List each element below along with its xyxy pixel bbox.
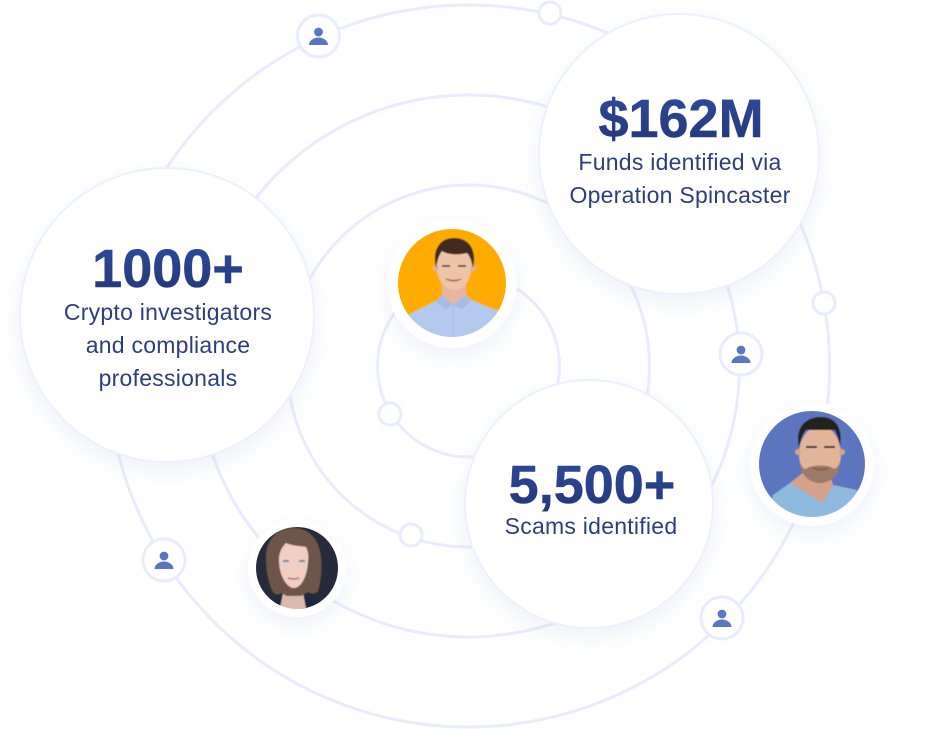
concentric orbit rings: [108, 5, 830, 727]
panel: funds identified stat: Funds identified via: [578, 149, 782, 175]
panel: crypto investigators stat: [20, 168, 314, 462]
icon: user node top: [298, 15, 340, 57]
panel: scams identified stat: Scams identified: [505, 513, 677, 539]
panel: scams identified stat: 5,500+: [509, 455, 675, 515]
panel: funds identified stat: Operation Spincaster: [569, 182, 791, 208]
icon: user node right: [720, 333, 762, 375]
empty orbit nodes: [379, 2, 835, 546]
panel: crypto investigators stat: Crypto investigators: [64, 299, 272, 325]
icon: user node bottom right: [701, 597, 743, 639]
portrait: woman on dark: [248, 519, 346, 617]
panel: funds identified stat: $162M: [598, 89, 764, 149]
panel: funds identified stat: [539, 14, 819, 294]
portrait: man on blue: [750, 402, 874, 526]
icon: user node left: [143, 539, 185, 581]
panel: crypto investigators stat: professionals: [99, 365, 237, 391]
portrait: man on orange: [387, 218, 517, 348]
panel: scams identified stat: [465, 380, 713, 628]
panel: crypto investigators stat: and compliance: [86, 332, 250, 358]
panel: crypto investigators stat: 1000+: [92, 239, 244, 299]
